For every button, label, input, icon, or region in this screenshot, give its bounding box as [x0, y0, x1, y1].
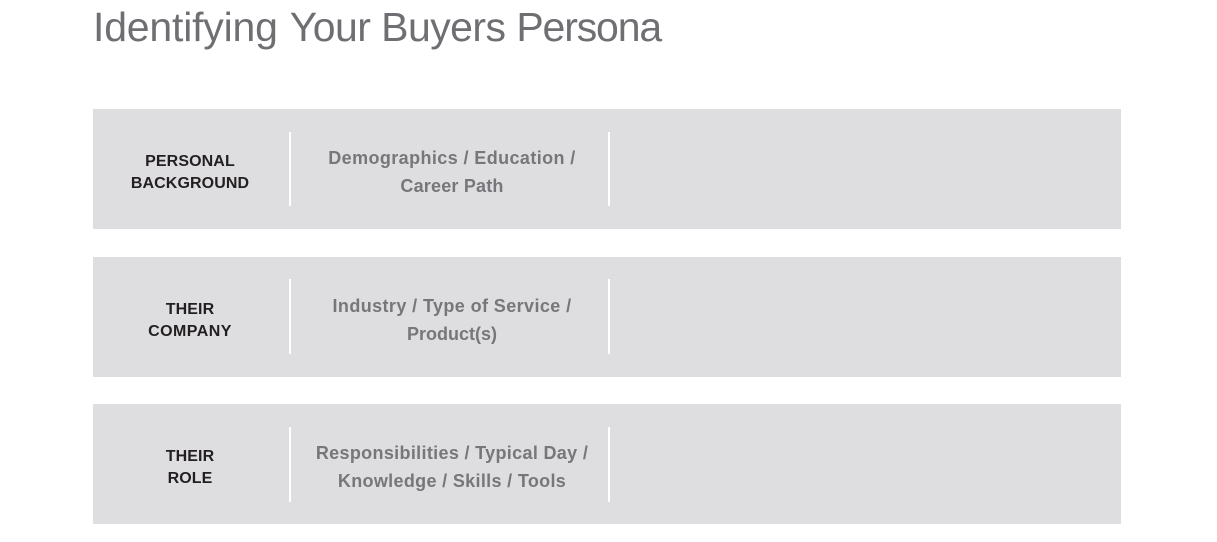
text: personal background details: Demographics / Education /: [328, 148, 576, 168]
panel: their company: [93, 257, 1121, 377]
label: their role: THEIR: [166, 448, 214, 465]
text: role details: Knowledge / Skills / Tools: [338, 471, 566, 491]
label: their company: THEIR: [166, 301, 214, 318]
label: personal background: BACKGROUND: [131, 175, 249, 192]
panel: their role: [93, 404, 1121, 524]
text: company details: [333, 296, 571, 344]
text: personal background details: Career Path: [400, 176, 504, 196]
label: personal background: PERSONAL: [145, 153, 235, 170]
label: their company: [148, 301, 232, 340]
label: their role: ROLE: [168, 470, 212, 487]
text: company details: Industry / Type of Service /: [333, 296, 571, 316]
label: personal background: [131, 153, 249, 192]
text: personal background details: [328, 148, 576, 196]
text: role details: [316, 443, 588, 491]
panel: personal background: [93, 109, 1121, 229]
title: Identifying Your Buyers Persona: [93, 4, 661, 50]
text: role details: Responsibilities / Typical Day /: [316, 443, 588, 463]
label: their role: [166, 448, 214, 487]
label: their company: COMPANY: [148, 323, 232, 340]
text: company details: Product(s): [407, 324, 497, 344]
